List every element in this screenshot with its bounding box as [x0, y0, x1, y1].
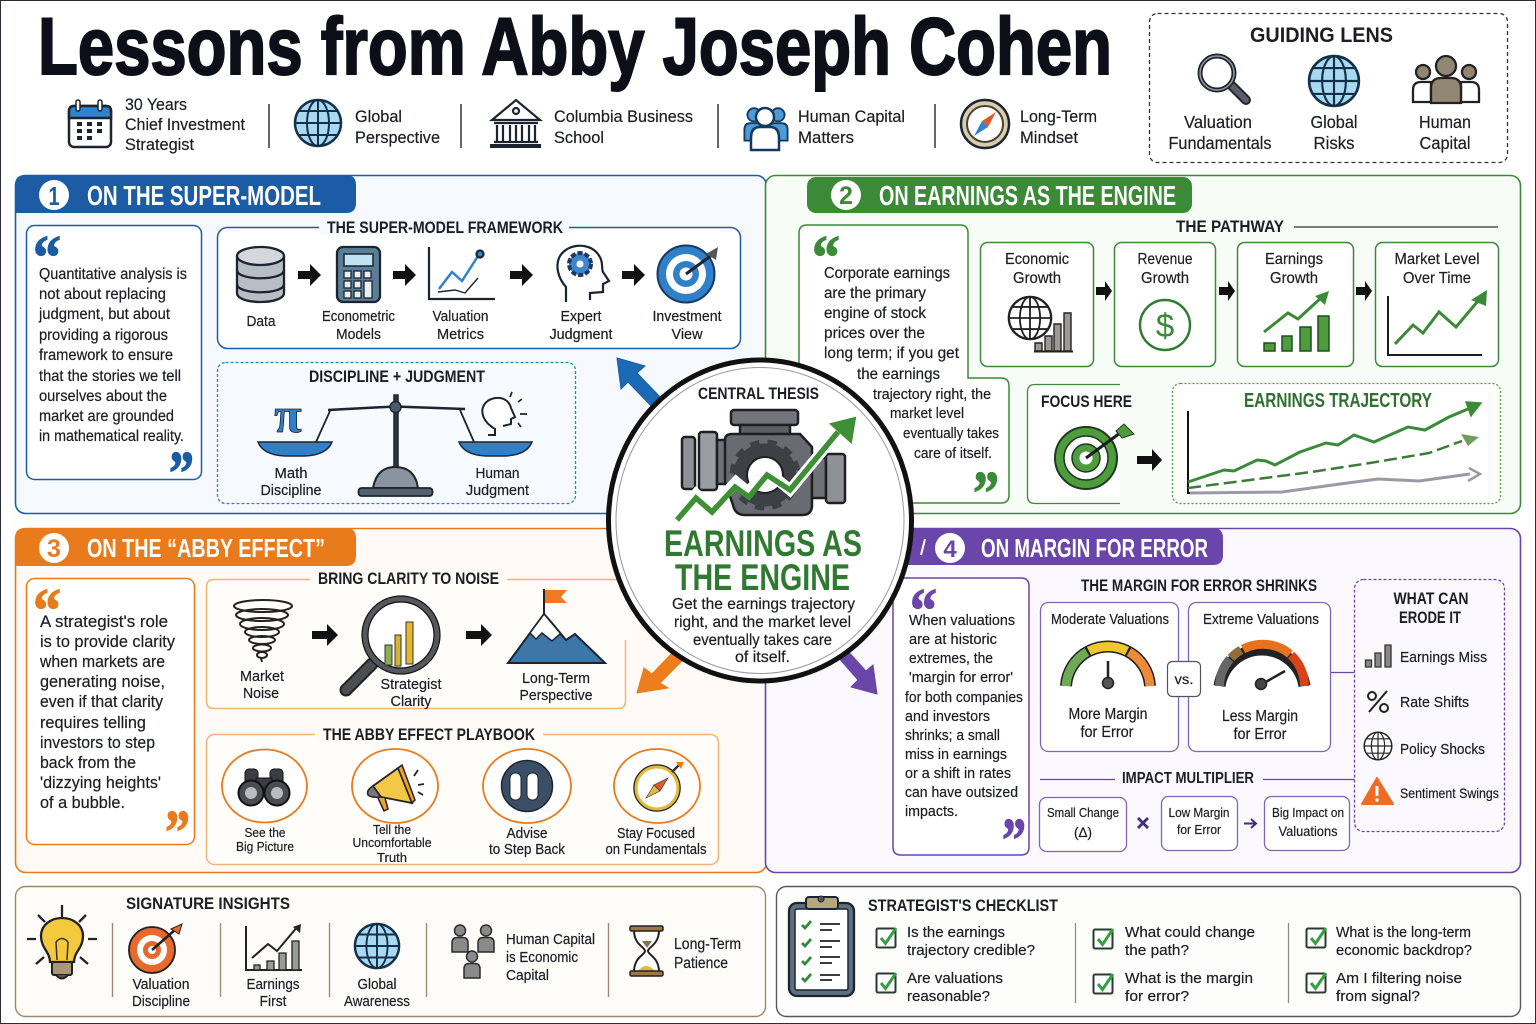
- text: columbia: [554, 107, 693, 147]
- icon: magnifier with bars: [346, 596, 440, 690]
- card: low margin: [1162, 796, 1238, 850]
- what can erode it: Policy Shocks: [1400, 742, 1485, 758]
- focus here: FOCUS HERE: [1041, 392, 1132, 411]
- icon: bars: [1366, 645, 1391, 667]
- step: economic growth: [980, 242, 1094, 366]
- labels: Econometric: [322, 308, 395, 325]
- checklist item: economic backdrop?: [1336, 942, 1472, 959]
- checklist item: What is the long-term: [1336, 924, 1471, 941]
- labels: Market: [240, 669, 284, 685]
- icon: globe: [295, 100, 341, 146]
- item: long-term patience: [630, 926, 741, 976]
- discipline + judgment box: DISCIPLINE + JUDGMENT: [309, 368, 485, 386]
- quote box: [26, 224, 202, 508]
- arrow: [466, 624, 492, 646]
- text: columbia: Columbia Business: [554, 107, 693, 126]
- card: small change: [1040, 798, 1126, 852]
- labels: View: [672, 326, 703, 343]
- icon: warning: [1362, 778, 1393, 804]
- header tab: 2: [839, 182, 853, 210]
- step: economic growth: Economic: [1005, 251, 1069, 268]
- quote box: that the stories we tell: [39, 368, 181, 385]
- item: human capital: Capital: [506, 967, 549, 984]
- icon: light bulb: [27, 905, 97, 978]
- checklist item: trajectory credible?: [907, 942, 1035, 959]
- quote box: “: [33, 577, 61, 645]
- text: global perspective: Perspective: [355, 128, 440, 147]
- arrow: to panel 3: [637, 651, 683, 693]
- quote box: even if that clarity: [40, 692, 163, 711]
- quote box: “: [33, 224, 61, 292]
- icon: mountain with flag: [508, 589, 605, 663]
- panel: signature insights: SIGNATURE INSIGHTS: [126, 894, 290, 913]
- quote box: is to provide clarity: [40, 632, 175, 651]
- labels: Valuation: [432, 308, 488, 325]
- checklist item: [1306, 924, 1472, 959]
- icon: columbia building: [490, 100, 541, 146]
- icon: globe: [1309, 56, 1359, 106]
- item: valuation discipline: Discipline: [132, 993, 190, 1010]
- framework box: THE SUPER-MODEL FRAMEWORK: [327, 218, 564, 237]
- label: human capital: [1419, 112, 1471, 153]
- icon: percent: [1368, 691, 1388, 712]
- quote box: for both companies: [905, 689, 1023, 706]
- panel: signature insights: [16, 886, 766, 1016]
- panel: guiding lens: [1150, 14, 1508, 162]
- headline: [664, 523, 862, 598]
- icon: calculator: [337, 247, 380, 302]
- card: big impact: Big Impact on: [1272, 805, 1344, 820]
- header tab: 4: [943, 536, 957, 563]
- labels: Advise: [506, 826, 548, 842]
- icon: head with gear: [557, 246, 609, 302]
- item: valuation discipline: Valuation: [132, 976, 190, 993]
- card: extreme valuations: for Error: [1234, 726, 1286, 743]
- panel 2: on earnings as the engine: [766, 176, 1520, 528]
- item: long-term patience: Patience: [674, 955, 728, 972]
- heading: the pathway: THE PATHWAY: [1176, 217, 1285, 236]
- item: long-term patience: Long-Term: [674, 936, 741, 953]
- quote box: Corporate earnings: [824, 265, 950, 282]
- checklist item: for error?: [1125, 988, 1189, 1005]
- card: small change: (Δ): [1074, 824, 1092, 840]
- icon: engine with growth arrow: [670, 410, 855, 523]
- labels: [246, 308, 722, 343]
- step: revenue growth: [1114, 242, 1216, 366]
- icon: multiply: [1138, 818, 1148, 828]
- central thesis circle: [608, 360, 912, 681]
- labels: [236, 822, 706, 865]
- item: human capital: is Economic: [506, 949, 578, 966]
- heading: impact multiplier: IMPACT MULTIPLIER: [1122, 770, 1254, 787]
- labels: Investment: [652, 308, 722, 325]
- text: human capital: [798, 107, 905, 147]
- card: low margin: for Error: [1177, 822, 1222, 837]
- checklist item: Am I filtering noise: [1336, 970, 1462, 987]
- labels: Big Picture: [236, 839, 294, 854]
- header tab: [15, 175, 356, 213]
- checklist item: What could change: [1125, 924, 1255, 941]
- header tab: [807, 177, 1192, 213]
- quote box: ”: [973, 460, 999, 528]
- quote box: when markets are: [39, 652, 165, 671]
- quote box: and investors: [905, 708, 990, 725]
- headline: THE ENGINE: [675, 557, 850, 598]
- quote box: engine of stock: [824, 305, 926, 322]
- card: small change: Small Change: [1047, 805, 1119, 820]
- icon: globe: [1364, 732, 1392, 760]
- icon: green target: [1055, 424, 1134, 489]
- checklist item: [876, 970, 1003, 1005]
- labels: Perspective: [520, 688, 592, 704]
- subtext: [672, 596, 855, 666]
- arrow: [298, 264, 321, 286]
- quote box: [780, 224, 1009, 528]
- what can erode it: Rate Shifts: [1400, 695, 1469, 711]
- label: global risks: Global: [1310, 112, 1358, 132]
- checklist item: [1094, 970, 1253, 1005]
- icon: clipboard: [789, 896, 854, 996]
- heading: margin shrinks: THE MARGIN FOR ERROR SHRINKS: [1081, 576, 1317, 595]
- quote box: “: [910, 577, 937, 645]
- discipline + judgment box: [218, 362, 576, 504]
- labels: Stay Focused: [617, 826, 695, 842]
- central thesis circle: CENTRAL THESIS: [698, 384, 819, 403]
- arrow: [1096, 281, 1112, 301]
- quote box: generating noise,: [40, 672, 165, 691]
- quote box: eventually takes: [903, 425, 999, 442]
- text: columbia: School: [554, 128, 604, 147]
- arrow: [510, 264, 533, 286]
- gauge: extreme: [1220, 650, 1304, 686]
- card: extreme valuations: Extreme Valuations: [1203, 612, 1319, 628]
- card: low margin: Low Margin: [1168, 805, 1230, 820]
- discipline + judgment box: Judgment: [466, 482, 530, 499]
- checklist item: Is the earnings: [907, 924, 1005, 941]
- arrow: [1137, 449, 1162, 471]
- quote box: prices over the: [824, 325, 925, 342]
- label: valuation fundamentals: [1168, 112, 1272, 153]
- labels: Models: [336, 326, 381, 343]
- label: human capital: Human: [1419, 112, 1471, 132]
- credentials strip: [69, 95, 1097, 154]
- earnings trajectory chart: [1172, 384, 1500, 504]
- quote box: 'dizzying heights': [40, 773, 161, 792]
- icon: compass: [961, 100, 1009, 148]
- arrow: [1244, 819, 1256, 828]
- text: human capital: Human Capital: [798, 107, 905, 126]
- quote box: ”: [1002, 807, 1026, 875]
- labels: Expert: [560, 308, 602, 325]
- labels: Noise: [243, 686, 279, 702]
- header tab: ON THE SUPER-MODEL: [87, 180, 321, 211]
- quote box: Quantitative analysis is: [39, 266, 187, 283]
- quote box: of a bubble.: [40, 793, 125, 812]
- item: human capital: [452, 925, 595, 984]
- quote box: ”: [165, 799, 190, 867]
- card: extreme valuations: Less Margin: [1222, 708, 1298, 725]
- quote box: [26, 577, 194, 867]
- card: moderate valuations: [1040, 602, 1178, 752]
- discipline + judgment box: Human: [476, 465, 520, 482]
- quote box: providing a rigorous: [39, 327, 168, 344]
- quote box: can have outsized: [905, 784, 1018, 801]
- bring clarity box: BRING CLARITY TO NOISE: [318, 570, 499, 588]
- panel 3: on the abby effect: [15, 528, 766, 872]
- quote box: in mathematical reality.: [39, 428, 184, 445]
- checklist item: from signal?: [1336, 988, 1420, 1005]
- labels: Long-Term: [522, 671, 590, 687]
- labels: Tell the: [373, 822, 411, 837]
- item: earnings first: [246, 924, 302, 1010]
- labels: to Step Back: [489, 842, 566, 858]
- label: valuation fundamentals: Valuation: [1184, 112, 1252, 132]
- quote box: ”: [169, 440, 194, 508]
- icon: binoculars: [222, 750, 307, 822]
- labels: Uncomfortable: [352, 835, 432, 850]
- checklist item: Are valuations: [907, 970, 1003, 987]
- checklist item: What is the margin: [1125, 970, 1253, 987]
- checklist item: [1094, 924, 1255, 959]
- arrow: to panel 4: [837, 649, 877, 694]
- icon: pause: [483, 749, 571, 823]
- subtext: Get the earnings trajectory: [672, 596, 855, 613]
- header tab: 3: [47, 535, 61, 563]
- header tab: ON MARGIN FOR ERROR: [981, 533, 1208, 563]
- header tab: [15, 528, 356, 566]
- icon: data: [237, 247, 284, 302]
- title: Lessons from Abby Joseph Cohen: [38, 2, 1112, 92]
- quote box: long term; if you get: [824, 345, 960, 362]
- item: earnings first: First: [260, 993, 287, 1010]
- step: market level: Over Time: [1403, 270, 1471, 287]
- step: revenue growth: $: [1156, 307, 1174, 344]
- quote box: ourselves about the: [39, 388, 167, 405]
- step: revenue growth: Growth: [1141, 270, 1189, 287]
- quote box: or a shift in rates: [905, 765, 1011, 782]
- what can erode it: Sentiment Swings: [1400, 785, 1499, 801]
- arrow: [1356, 281, 1372, 301]
- header tab: ON THE “ABBY EFFECT”: [87, 533, 325, 563]
- icon: people: [744, 108, 788, 150]
- step: economic growth: Growth: [1013, 270, 1061, 287]
- label: global risks: [1310, 112, 1358, 153]
- framework box: [218, 218, 740, 348]
- text: 30 years: Chief Investment: [125, 115, 245, 134]
- label: global risks: Risks: [1314, 133, 1355, 153]
- text: global perspective: Global: [355, 107, 402, 126]
- card: moderate valuations: Moderate Valuations: [1051, 612, 1169, 628]
- header tab: 1: [48, 181, 60, 211]
- text: long term: Mindset: [1020, 128, 1078, 147]
- labels: See the: [244, 825, 286, 840]
- panel 1: on the super-model: [15, 175, 766, 514]
- panel: strategist's checklist: STRATEGIST'S CHECKLIST: [868, 896, 1059, 915]
- step: revenue growth: Revenue: [1138, 251, 1193, 268]
- text: human capital: Matters: [798, 128, 854, 147]
- quote box: “: [812, 224, 840, 292]
- earnings trajectory chart: EARNINGS TRAJECTORY: [1244, 390, 1432, 412]
- arrow: [312, 624, 338, 646]
- step: earnings growth: Earnings: [1265, 251, 1323, 268]
- item: global awareness: Awareness: [344, 993, 410, 1010]
- step: market level: Market Level: [1394, 251, 1480, 268]
- quote box: back from the: [40, 753, 136, 772]
- text: 30 years: Strategist: [125, 135, 194, 154]
- item: global awareness: [344, 924, 410, 1010]
- panel 4: on margin for error: [766, 528, 1520, 875]
- gauge: moderate: [1066, 646, 1150, 686]
- quote box: market are grounded: [39, 408, 174, 425]
- checklist item: [876, 924, 1035, 959]
- quote box: When valuations: [909, 612, 1015, 629]
- step: earnings growth: [1238, 242, 1354, 366]
- quote box: are the primary: [824, 285, 926, 302]
- quote box: framework to ensure: [39, 347, 173, 364]
- label: valuation fundamentals: Fundamentals: [1168, 133, 1272, 153]
- quote box: are at historic: [909, 631, 997, 648]
- headline: EARNINGS AS: [664, 523, 862, 564]
- arrow: [393, 264, 416, 286]
- header tab: [900, 528, 1223, 565]
- quote box: market level: [890, 405, 964, 422]
- quote box: miss in earnings: [905, 746, 1007, 763]
- labels: Data: [246, 313, 276, 330]
- quote box: investors to step: [40, 733, 155, 752]
- quote box: shrinks; a small: [905, 727, 1000, 744]
- labels: on Fundamentals: [606, 842, 706, 858]
- icon: balance scale: [258, 387, 532, 496]
- icon: target: [658, 246, 718, 302]
- text: global perspective: [355, 107, 440, 147]
- quote box: extremes, the: [909, 650, 993, 667]
- focus here: [1028, 384, 1134, 504]
- what can erode it: WHAT CAN: [1394, 590, 1468, 608]
- item: global awareness: Global: [358, 976, 396, 993]
- labels: Clarity: [390, 694, 432, 710]
- panel: guiding lens: GUIDING LENS: [1250, 24, 1393, 47]
- labels: Metrics: [437, 326, 484, 343]
- label: human capital: Capital: [1420, 133, 1470, 153]
- icon: magnifier: [1200, 56, 1246, 100]
- what can erode it: ERODE IT: [1399, 609, 1461, 627]
- icon: people: [1413, 56, 1479, 103]
- quote box: 'margin for error': [909, 669, 1013, 686]
- quote box: judgment, but about: [38, 306, 171, 323]
- arrow: [622, 264, 645, 286]
- what can erode it: Earnings Miss: [1400, 650, 1487, 666]
- vs badge: vs.: [1174, 671, 1194, 687]
- icon: balance scale: π: [274, 387, 302, 443]
- quote box: [893, 577, 1029, 875]
- text: long term: [1020, 107, 1097, 147]
- checklist item: reasonable?: [907, 988, 990, 1005]
- quote box: care of itself.: [914, 445, 992, 462]
- discipline + judgment box: Discipline: [260, 482, 322, 499]
- item: valuation discipline: [129, 924, 190, 1010]
- subtext: eventually takes care: [693, 632, 832, 649]
- step: earnings growth: Growth: [1270, 270, 1318, 287]
- subtext: right, and the market level: [674, 614, 851, 631]
- checklist item: [1306, 970, 1462, 1005]
- quote box: requires telling: [40, 713, 146, 732]
- text: long term: Long-Term: [1020, 107, 1097, 126]
- arrow: [1219, 281, 1235, 301]
- labels: [240, 669, 592, 710]
- quote box: impacts.: [905, 803, 958, 820]
- subtext: of itself.: [735, 649, 790, 666]
- checklist item: the path?: [1125, 942, 1189, 959]
- step: market level: [1376, 242, 1498, 366]
- text: 30 years: 30 Years: [125, 95, 187, 114]
- arrow: to panel 1: [617, 358, 665, 411]
- labels: Strategist: [380, 677, 442, 693]
- labels: Truth: [377, 850, 407, 865]
- item: earnings first: Earnings: [246, 976, 300, 993]
- vs badge: [1168, 662, 1200, 696]
- quote box: the earnings: [857, 366, 940, 383]
- discipline + judgment box: Math: [274, 465, 308, 482]
- header tab: ON EARNINGS AS THE ENGINE: [879, 180, 1176, 211]
- icon: calendar: [69, 100, 111, 147]
- item: human capital: Human Capital: [506, 931, 595, 948]
- labels: Judgment: [550, 326, 613, 343]
- quote box: not about replacing: [39, 286, 166, 303]
- text: 30 years: [125, 95, 245, 154]
- icon: valuation chart: [429, 247, 495, 299]
- panel: strategist's checklist: [776, 886, 1520, 1016]
- icon: megaphone: [352, 749, 438, 823]
- quote box: trajectory right, the: [873, 386, 991, 403]
- what can erode it: [1354, 580, 1504, 832]
- card: moderate valuations: More Margin: [1068, 706, 1148, 723]
- card: moderate valuations: for Error: [1080, 724, 1134, 741]
- playbook box: [206, 725, 718, 865]
- card: extreme valuations: [1188, 602, 1330, 752]
- icon: compass with dart: [614, 749, 700, 823]
- bring clarity box: [206, 570, 626, 710]
- playbook box: THE ABBY EFFECT PLAYBOOK: [323, 725, 536, 744]
- quote box: A strategist's role: [40, 612, 168, 631]
- card: big impact: Valuations: [1278, 823, 1338, 839]
- icon: tornado: [234, 600, 292, 662]
- card: big impact: [1264, 796, 1350, 850]
